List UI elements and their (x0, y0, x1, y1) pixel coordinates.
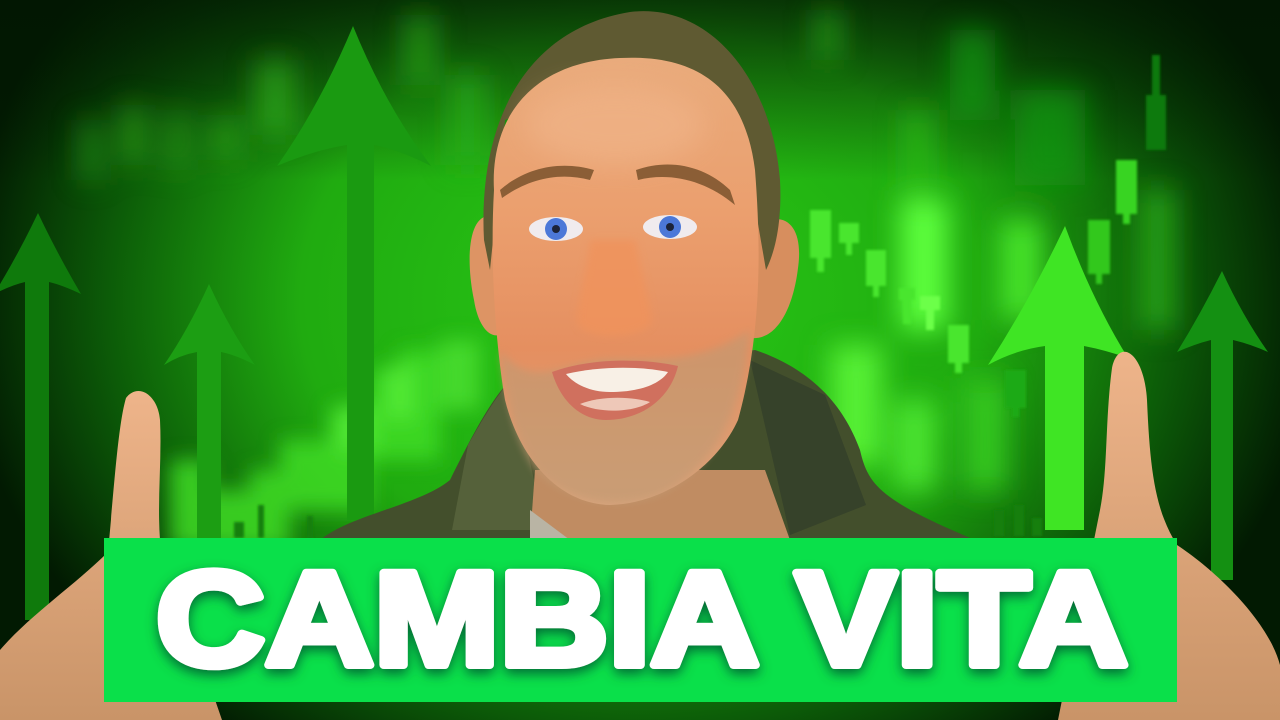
blurred green glow chart: left (170, 340, 480, 550)
blurred candlestick chart: background (80, 10, 1175, 490)
t-shirt collar (530, 510, 570, 540)
arrow: small left (164, 284, 255, 560)
left hand (0, 391, 222, 720)
arrow: far left (0, 213, 81, 620)
nose (577, 240, 652, 336)
arrow: tall center-left (277, 26, 431, 520)
left eyebrow (500, 166, 594, 198)
banner (104, 538, 1177, 702)
neck (530, 470, 790, 540)
right ear (752, 219, 799, 338)
right eyebrow (636, 164, 735, 205)
hood right fold (750, 360, 866, 535)
hoodie (320, 350, 975, 540)
person (320, 11, 975, 540)
left eye (529, 217, 583, 241)
stubble (500, 330, 750, 503)
headline: CAMBIA VITA (156, 545, 1128, 694)
forehead highlight (525, 85, 705, 165)
face (493, 58, 759, 505)
sharp candlesticks: right (234, 55, 1166, 538)
arrow: far right (1177, 271, 1268, 580)
left ear (470, 216, 505, 335)
arrow: bright right (988, 226, 1128, 530)
hair (483, 11, 780, 270)
hood left fold (452, 380, 545, 530)
mouth (552, 361, 678, 420)
right hand (1058, 352, 1280, 720)
right eye (643, 215, 697, 239)
